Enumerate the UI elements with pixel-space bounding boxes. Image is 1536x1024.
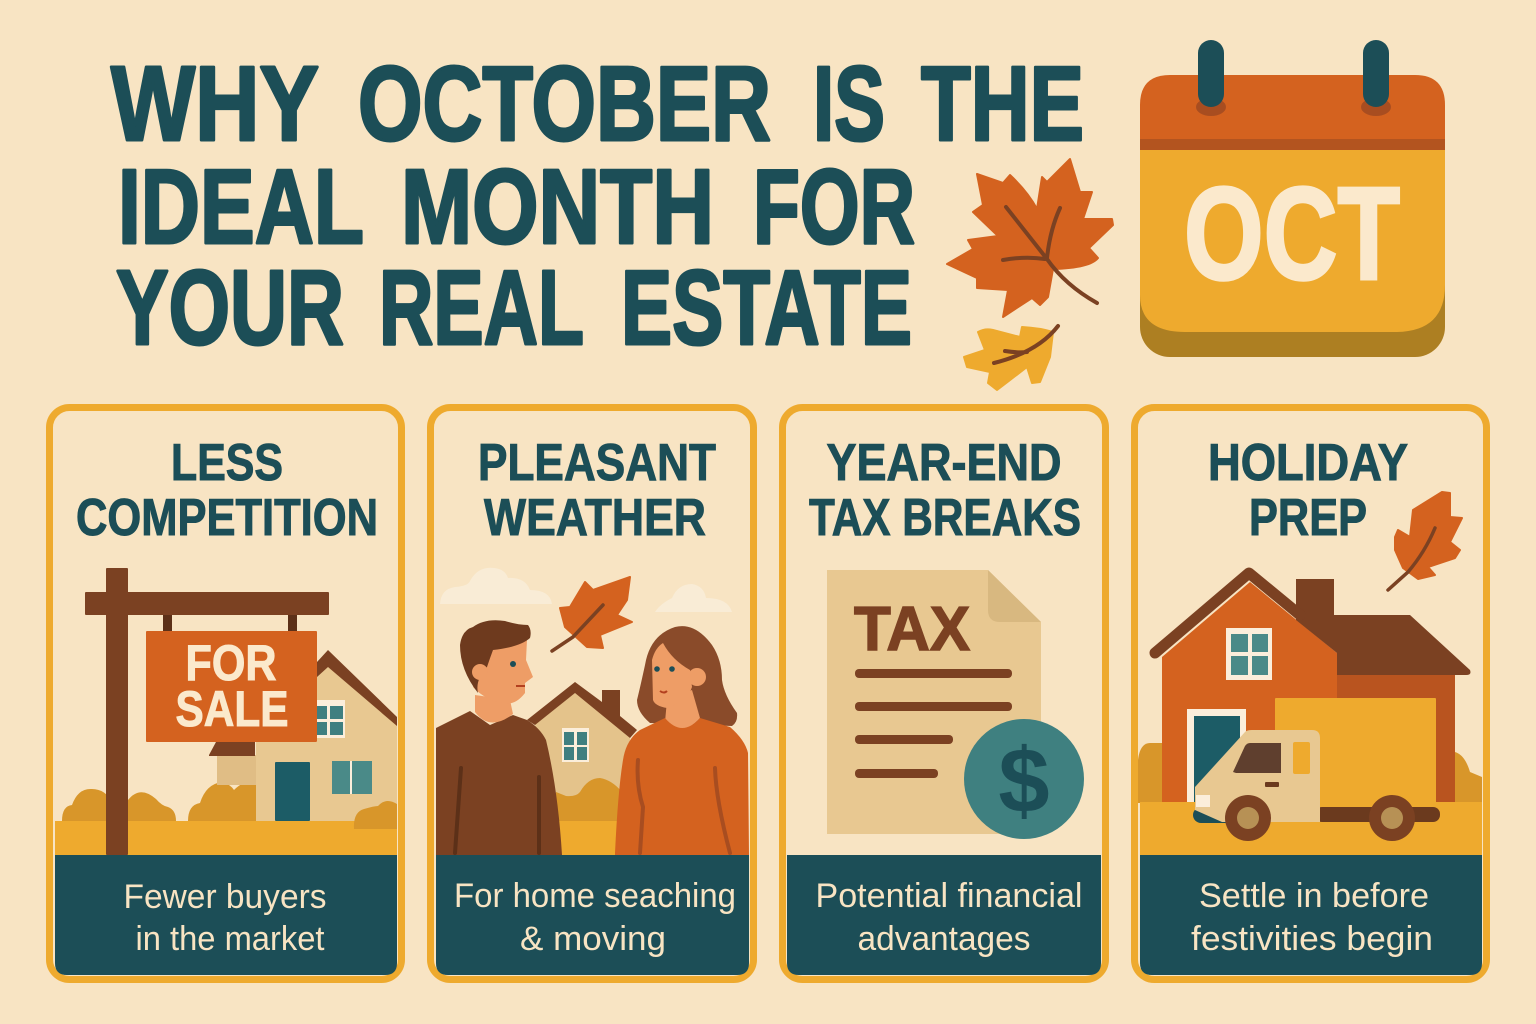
panel: pleasant weather bbox=[430, 408, 754, 980]
caption bar bbox=[436, 855, 749, 975]
title: REAL bbox=[379, 249, 584, 367]
title: THE bbox=[921, 45, 1084, 163]
heading: COMPETITION bbox=[76, 489, 378, 547]
title bbox=[111, 45, 1084, 367]
title: WHY bbox=[111, 45, 319, 163]
illustration: for sale sign and house: FOR bbox=[186, 635, 276, 691]
heading: YEAR-END bbox=[826, 434, 1062, 492]
icon: calendar bbox=[1140, 40, 1445, 357]
heading: LESS bbox=[171, 434, 283, 492]
caption bar: in the market bbox=[136, 920, 325, 958]
heading bbox=[76, 434, 378, 547]
caption bar: advantages bbox=[858, 920, 1030, 958]
title: MONTH bbox=[401, 148, 714, 266]
heading: HOLIDAY bbox=[1208, 434, 1408, 492]
title: FOR bbox=[753, 148, 915, 266]
caption bar: & moving bbox=[520, 920, 666, 958]
illustration: for sale sign and house bbox=[55, 568, 397, 856]
title: ESTATE bbox=[621, 249, 912, 367]
icon: tax document: TAX bbox=[854, 595, 970, 664]
caption bar: Settle in before bbox=[1199, 877, 1429, 915]
heading: WEATHER bbox=[484, 489, 706, 547]
heading bbox=[1208, 434, 1408, 547]
heading bbox=[809, 434, 1081, 547]
caption bar: Fewer buyers bbox=[124, 878, 326, 916]
caption bar bbox=[787, 855, 1101, 975]
panel: less competition bbox=[50, 408, 402, 980]
illustration: couple, house and leaf bbox=[436, 568, 749, 855]
panel: holiday prep bbox=[1134, 408, 1486, 980]
icon: small leaf bbox=[964, 326, 1058, 390]
heading bbox=[478, 434, 716, 547]
title: IS bbox=[813, 45, 885, 163]
title: OCTOBER bbox=[358, 45, 771, 163]
icon: dollar coin: $ bbox=[998, 730, 1050, 832]
caption bar: festivities begin bbox=[1191, 920, 1433, 958]
heading: TAX BREAKS bbox=[809, 489, 1081, 547]
illustration: for sale sign and house: SALE bbox=[176, 681, 288, 737]
caption bar bbox=[55, 855, 397, 975]
caption bar: Potential financial bbox=[816, 877, 1082, 915]
caption bar bbox=[1140, 855, 1482, 975]
illustration: house and moving truck bbox=[1138, 573, 1482, 856]
icon: maple leaf bbox=[947, 159, 1113, 317]
panel: year-end tax breaks bbox=[782, 408, 1106, 980]
heading: PREP bbox=[1249, 489, 1367, 547]
icon: calendar: OCT bbox=[1184, 160, 1400, 307]
title: IDEAL bbox=[118, 148, 364, 266]
icon: dollar coin bbox=[964, 719, 1084, 839]
icon: tax document bbox=[827, 570, 1041, 834]
icon: leaf bbox=[1388, 492, 1462, 590]
heading: PLEASANT bbox=[478, 434, 716, 492]
caption bar: For home seaching bbox=[454, 877, 736, 915]
title: YOUR bbox=[116, 249, 344, 367]
